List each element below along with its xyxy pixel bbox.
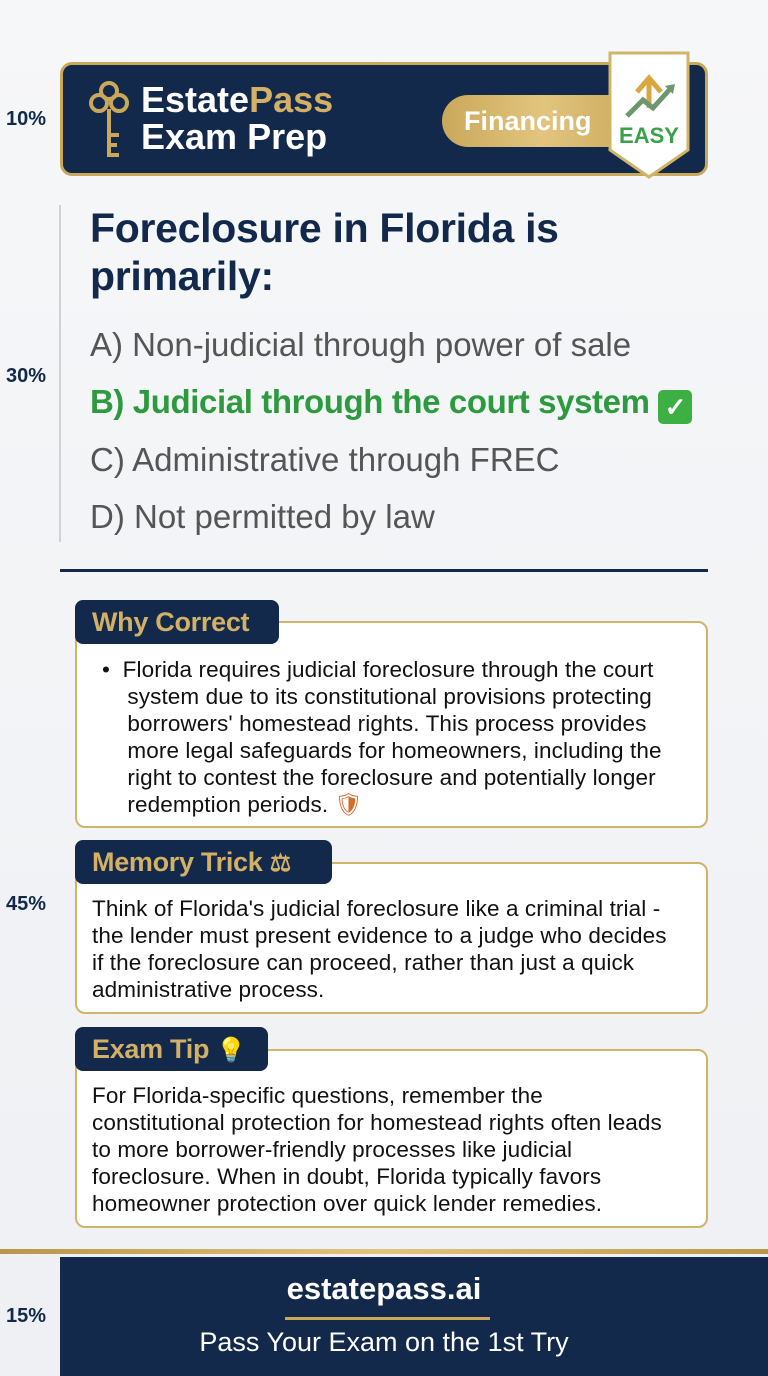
heading: why correct: [75, 600, 279, 644]
option A: A) Non-judicial through power of sale: [90, 326, 631, 363]
text: exam tip: For Florida-specific questions, remember the: [92, 1083, 543, 1108]
label: 30%: 30%: [6, 365, 46, 387]
label: 10%: 10%: [6, 108, 46, 130]
text: explanation: borrowers' homestead rights. This process provides: [127, 711, 647, 736]
text: explanation: system due to its constitutional provisions protecting: [127, 684, 652, 709]
brand title: Exam Prep: [141, 116, 327, 157]
option B correct: ✓: [665, 392, 686, 422]
question: Foreclosure in Florida is: [90, 205, 559, 251]
text: explanation: • Florida requires judicial foreclosure through the court: [102, 657, 653, 682]
heading: why correct: Why Correct: [92, 607, 249, 637]
text: exam tip: [75, 1049, 708, 1228]
brand title: [141, 79, 333, 157]
text: exam tip: homeowner protection over quick lender remedies.: [92, 1191, 602, 1216]
option C: C) Administrative through FREC: [90, 441, 560, 478]
panel: exam tip: [75, 1027, 708, 1228]
heading: memory trick: Memory Trick ⚖: [92, 847, 291, 877]
option B correct: B) Judicial through the court system: [90, 383, 650, 420]
footer: site name: estatepass.ai: [287, 1271, 481, 1306]
label: 15%: 15%: [6, 1305, 46, 1327]
text: explanation: [75, 621, 708, 828]
icon: key: [89, 81, 129, 157]
brand title: EstatePass: [141, 79, 333, 120]
footer: [60, 1257, 768, 1376]
option D: D) Not permitted by law: [90, 498, 435, 535]
panel: memory trick: [75, 840, 708, 1014]
vertical accent line: [59, 205, 61, 542]
text: memory trick: [75, 862, 708, 1014]
panel: why correct: [75, 600, 708, 828]
divider: [60, 569, 708, 572]
badge: easy ribbon: [608, 52, 690, 179]
badge: easy ribbon: EASY: [619, 123, 679, 148]
label: 45%: 45%: [6, 893, 46, 915]
text: memory trick: if the foreclosure can proceed, rather than just a quick: [92, 950, 634, 975]
category pill: Financing: [464, 106, 592, 136]
text: memory trick: administrative process.: [92, 977, 324, 1002]
text: memory trick: the lender must present evidence to a judge who decides: [92, 923, 667, 948]
heading: exam tip: Exam Tip 💡: [92, 1034, 246, 1064]
text: exam tip: foreclosure. When in doubt, Florida typically favors: [92, 1164, 601, 1189]
question: primarily:: [90, 253, 274, 299]
text: explanation: redemption periods. 🛡: [127, 792, 363, 817]
gold rule: [0, 1249, 768, 1254]
footer: gold underline: [285, 1317, 490, 1320]
question: [90, 205, 559, 299]
text: exam tip: constitutional protection for homestead rights often leads: [92, 1110, 662, 1135]
text: explanation: more legal safeguards for homeowners, including the: [127, 738, 662, 763]
heading: memory trick: [75, 840, 332, 884]
category pill: [442, 95, 642, 147]
text: explanation: right to contest the foreclosure and potentially longer: [127, 765, 656, 790]
text: memory trick: Think of Florida's judicial foreclosure like a criminal trial -: [92, 896, 660, 921]
header banner: [60, 62, 708, 176]
text: exam tip: to more borrower-friendly processes like judicial: [92, 1137, 572, 1162]
footer: tagline: Pass Your Exam on the 1st Try: [199, 1327, 569, 1357]
heading: exam tip: [75, 1027, 268, 1071]
